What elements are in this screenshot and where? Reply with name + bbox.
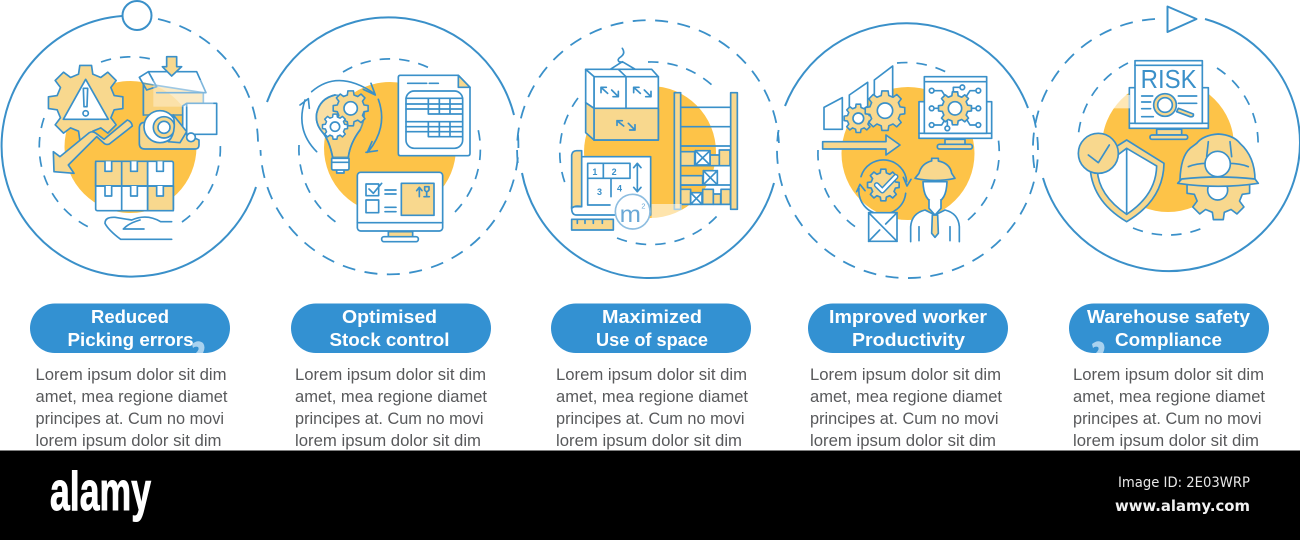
label pill 5: Warehouse safety bbox=[1087, 307, 1250, 327]
outer ring 3 bbox=[517, 20, 779, 278]
text block 1: amet, mea regione diamet bbox=[36, 388, 228, 406]
text block 1 bbox=[36, 366, 228, 450]
inner dashed ring 2 bbox=[299, 59, 480, 225]
start marker circle bbox=[122, 1, 152, 30]
icon: worker productivity bbox=[823, 66, 992, 242]
yellow blob 2 bbox=[324, 82, 456, 214]
text block 5: amet, mea regione diamet bbox=[1073, 388, 1265, 406]
label pill 3: Maximized bbox=[602, 307, 702, 327]
icon: use of space: 4 bbox=[617, 184, 622, 194]
panel: warehouse safety compliance bbox=[1033, 6, 1300, 271]
label pill 3 bbox=[551, 304, 751, 353]
yellow blob 1 bbox=[64, 81, 196, 213]
icon: picking errors bbox=[48, 57, 217, 239]
text block 1: Lorem ipsum dolor sit dim bbox=[36, 366, 226, 384]
text block 2: lorem ipsum dolor sit dim bbox=[295, 432, 481, 450]
label pill 2: Optimised bbox=[342, 307, 437, 327]
text block 4: amet, mea regione diamet bbox=[810, 388, 1002, 406]
text block 3: lorem ipsum dolor sit dim bbox=[556, 432, 742, 450]
text block 3: amet, mea regione diamet bbox=[556, 388, 748, 406]
text block 5 bbox=[1073, 366, 1265, 450]
text block 2: amet, mea regione diamet bbox=[295, 388, 487, 406]
inner dashed ring 1 bbox=[39, 57, 220, 230]
icon: use of space bbox=[572, 48, 737, 230]
icon: use of space: m bbox=[620, 201, 641, 227]
panel: optimised stock control bbox=[260, 17, 518, 274]
text block 3: Lorem ipsum dolor sit dim bbox=[556, 366, 747, 384]
icon: stock control bbox=[300, 75, 470, 242]
yellow blob 4 bbox=[842, 87, 974, 220]
yellow blob 3 bbox=[584, 86, 716, 218]
label pill 4: Improved worker bbox=[829, 307, 987, 327]
label pill 4: Productivity bbox=[852, 330, 965, 350]
image id: Image ID: 2E03WRP bbox=[1118, 475, 1250, 491]
icon: use of space: 2 bbox=[612, 167, 617, 177]
label pill 2: Stock control bbox=[330, 330, 450, 350]
icon: use of space: 2 bbox=[641, 202, 645, 211]
text block 4: Lorem ipsum dolor sit dim bbox=[810, 366, 1001, 384]
label pill 1 bbox=[30, 304, 230, 353]
text block 3: principes at. Cum no movi bbox=[556, 410, 744, 428]
label pill 4 bbox=[808, 304, 1008, 353]
text block 4 bbox=[810, 366, 1002, 450]
icon: safety compliance bbox=[1078, 61, 1258, 222]
label pill 1: Reduced bbox=[91, 307, 169, 327]
inner dashed ring 3 bbox=[560, 62, 718, 245]
footer bar bbox=[0, 450, 1300, 540]
text block 1: principes at. Cum no movi bbox=[36, 410, 224, 428]
text block 3 bbox=[556, 366, 748, 450]
inner dashed ring 5 bbox=[1078, 63, 1258, 235]
icon: safety compliance: RISK bbox=[1141, 64, 1197, 94]
inner dashed ring 4 bbox=[818, 63, 999, 230]
text block 2: Lorem ipsum dolor sit dim bbox=[295, 366, 486, 384]
outer ring 2 bbox=[260, 17, 518, 274]
label pill 5: Compliance bbox=[1115, 330, 1222, 350]
label pill 1: Picking errors bbox=[68, 330, 194, 350]
text block 2 bbox=[295, 366, 487, 450]
outer ring 5 bbox=[1033, 19, 1300, 271]
text block 2: principes at. Cum no movi bbox=[295, 410, 484, 428]
panel: reduced picking errors bbox=[2, 1, 258, 277]
label pill 3: Use of space bbox=[596, 330, 708, 350]
website: www.alamy.com bbox=[1115, 497, 1250, 515]
icon: use of space: 1 bbox=[592, 167, 597, 177]
outer ring 4 bbox=[777, 23, 1038, 278]
label pill 2 bbox=[291, 304, 491, 353]
text block 4: principes at. Cum no movi bbox=[810, 410, 998, 428]
text block 5: principes at. Cum no movi bbox=[1073, 410, 1262, 428]
panel: maximized use of space bbox=[517, 20, 779, 278]
label pill 5 bbox=[1069, 304, 1269, 353]
text block 5: lorem ipsum dolor sit dim bbox=[1073, 432, 1259, 450]
panel: improved worker productivity bbox=[777, 23, 1038, 278]
text block 4: lorem ipsum dolor sit dim bbox=[810, 432, 996, 450]
end marker triangle bbox=[1168, 6, 1196, 32]
alamy logo: alamy bbox=[50, 460, 151, 522]
outer ring 1 bbox=[2, 16, 258, 277]
text block 1: lorem ipsum dolor sit dim bbox=[36, 432, 221, 450]
yellow blob 5 bbox=[1102, 80, 1234, 212]
icon: use of space: 3 bbox=[597, 187, 602, 197]
watermark fragment bbox=[192, 341, 204, 353]
text block 5: Lorem ipsum dolor sit dim bbox=[1073, 366, 1264, 384]
watermark fragment bbox=[1092, 341, 1104, 353]
